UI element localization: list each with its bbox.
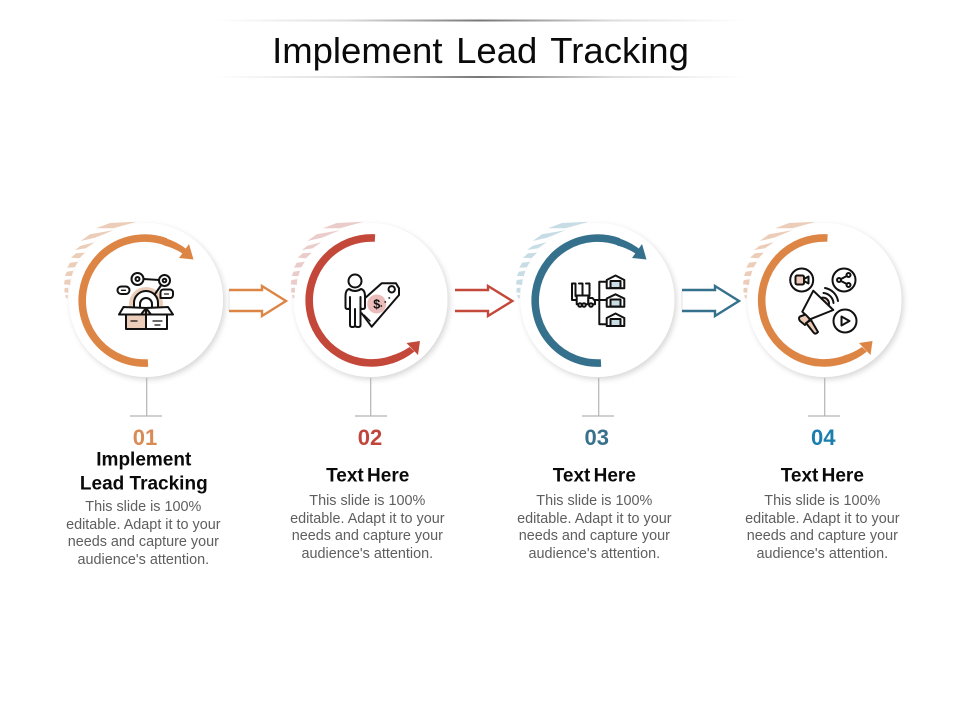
heading 1: Lead Tracking — [80, 473, 208, 494]
connector 2 — [355, 378, 387, 416]
icon: box with gear — [118, 273, 173, 329]
connector 1 — [130, 378, 162, 416]
arrow 2 — [455, 286, 512, 316]
body text 1: This slide is 100% — [85, 499, 201, 515]
heading 1: Implement — [96, 450, 191, 471]
icon: person with price tag — [346, 274, 399, 327]
body text 3: needs and capture your — [519, 528, 670, 544]
decorative stripes 2 — [291, 222, 363, 298]
body text 1: audience's attention. — [78, 552, 209, 568]
icon: factory and warehouses — [572, 276, 624, 326]
white disc 4 — [748, 223, 902, 377]
arrow 1 — [229, 286, 286, 316]
icon glyph: dollar: $ — [373, 298, 380, 312]
body text 2: needs and capture your — [292, 528, 443, 544]
body text 2: editable. Adapt it to your — [290, 511, 445, 527]
heading 4: Text Here — [781, 466, 864, 487]
step 1 circle — [64, 222, 223, 377]
body text 1: needs and capture your — [68, 534, 219, 550]
title rule bottom — [215, 76, 745, 78]
title: Implement Lead Tracking — [272, 30, 689, 71]
title rule top — [215, 20, 745, 22]
body text 4: audience's attention. — [757, 546, 888, 562]
progress arc 3 — [535, 238, 646, 363]
number 04: 04 — [811, 425, 836, 450]
step 3 circle — [516, 222, 674, 377]
decorative stripes 3 — [516, 222, 589, 298]
number 03: 03 — [584, 425, 609, 450]
arrow 3 — [682, 286, 739, 316]
body text 2: This slide is 100% — [309, 493, 425, 509]
white disc 3 — [520, 223, 674, 377]
body text 4: This slide is 100% — [764, 493, 880, 509]
body text 1: editable. Adapt it to your — [66, 517, 221, 533]
decorative stripes 4 — [743, 222, 816, 298]
progress arc 4 — [762, 238, 872, 364]
body text 4: editable. Adapt it to your — [745, 511, 900, 527]
step 2 circle — [291, 222, 448, 377]
body text 4: needs and capture your — [747, 528, 898, 544]
white disc 2 — [294, 223, 448, 377]
connector 4 — [808, 378, 840, 416]
body text 3: This slide is 100% — [536, 493, 652, 509]
icon: megaphone with media — [790, 268, 856, 334]
white disc 1 — [69, 223, 223, 377]
body text 2: audience's attention. — [302, 546, 433, 562]
decorative stripes 1 — [64, 222, 137, 298]
body text 3: editable. Adapt it to your — [517, 511, 672, 527]
progress arc 1 — [82, 238, 194, 363]
number 02: 02 — [358, 425, 382, 450]
connector 3 — [582, 378, 614, 416]
heading 2: Text Here — [326, 466, 409, 487]
heading 3: Text Here — [553, 466, 636, 487]
progress arc 2 — [309, 238, 420, 364]
body text 3: audience's attention. — [529, 546, 660, 562]
number 01: 01 — [133, 425, 157, 450]
step 4 circle — [743, 222, 902, 377]
